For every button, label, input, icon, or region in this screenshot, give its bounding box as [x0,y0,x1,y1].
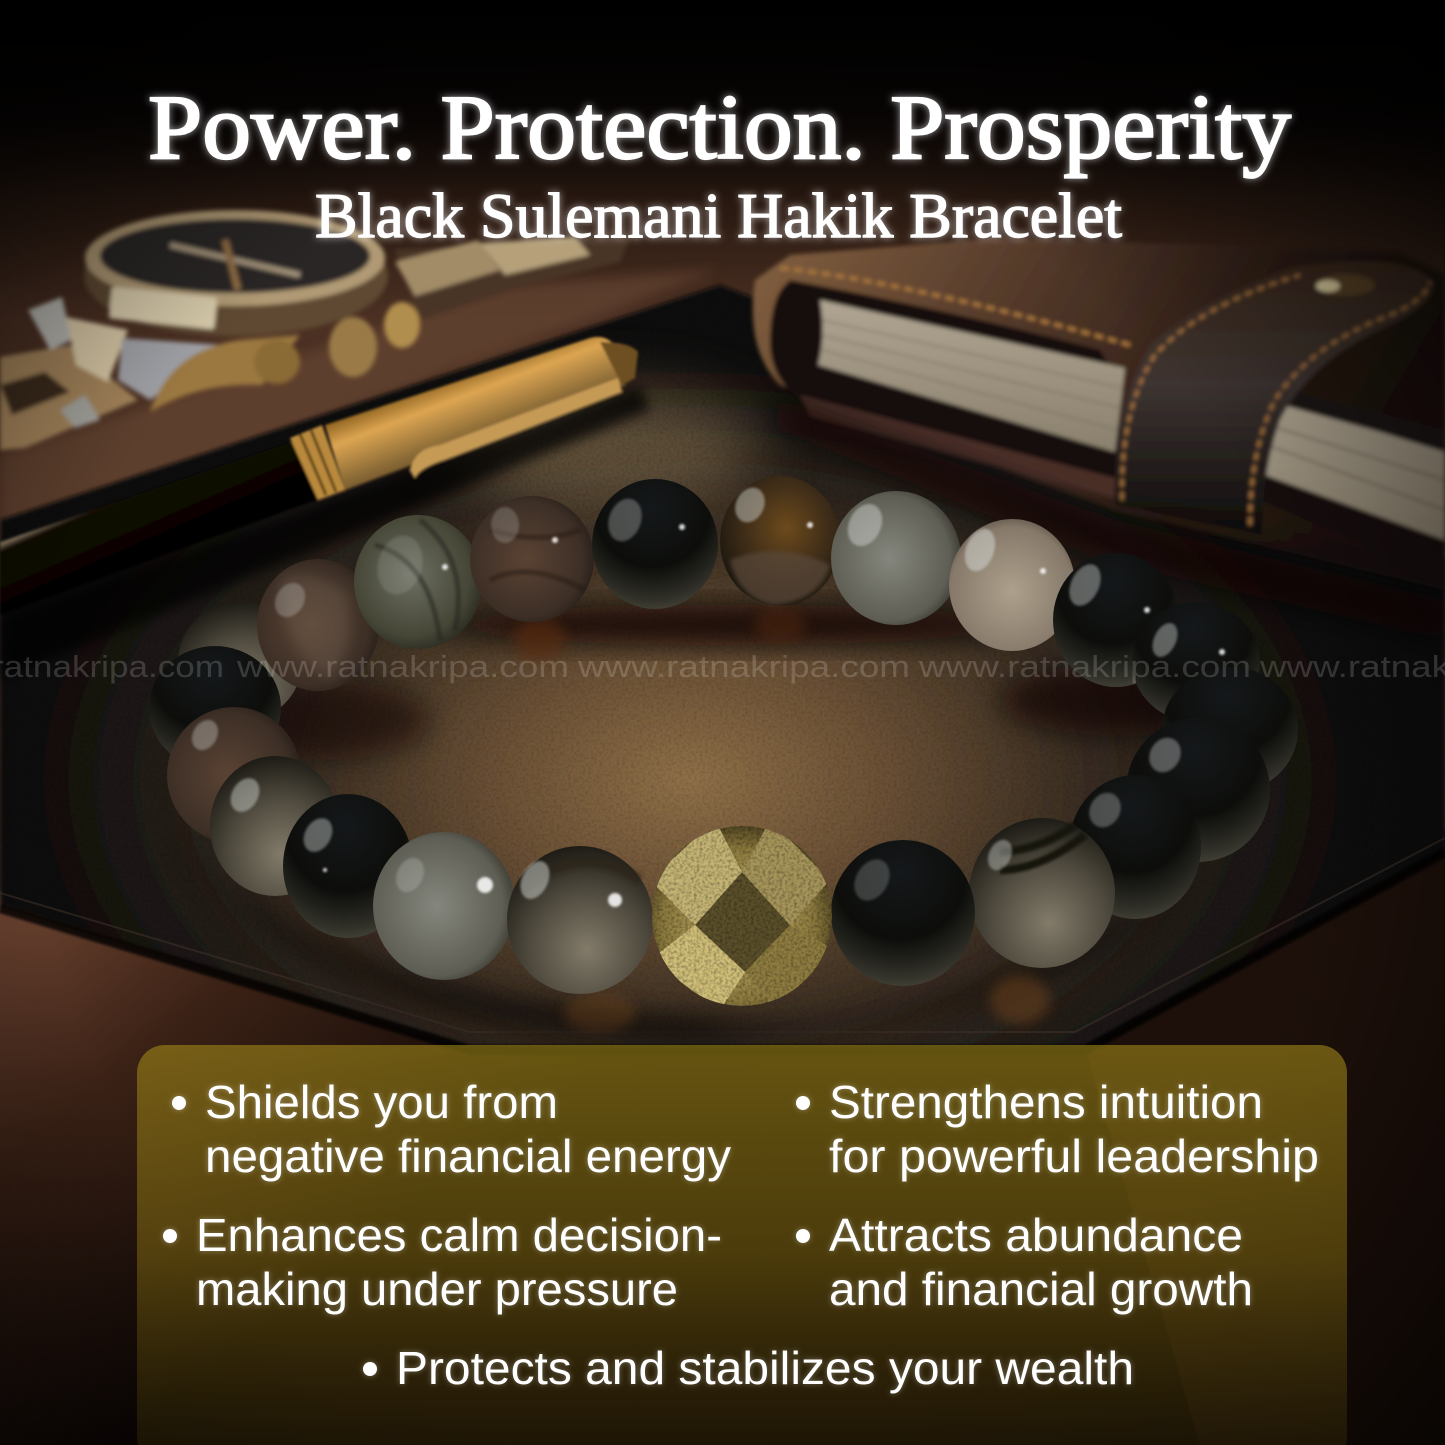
notebook [753,238,1445,640]
left beads [149,646,653,994]
watermark [0,649,1445,684]
benefit: wealth: Protects and stabilizes your wealth [396,1342,1134,1394]
benefit: abundance [796,1209,1253,1315]
subtitle: Black Sulemani Hakik Bracelet [315,180,1122,251]
benefit: intuition [796,1076,1319,1182]
benefit: intuition: Strengthens intuition [829,1076,1263,1128]
watermark: www.ratnakripa.com [577,649,910,684]
right beads [831,667,1298,986]
back beads [178,476,1260,722]
specular dots [323,522,1225,907]
benefit: intuition: for powerful leadership [829,1130,1319,1182]
benefit: calm decisions: Enhances calm decision- [196,1209,722,1261]
benefit: abundance: Attracts abundance [829,1209,1243,1261]
watermark: www.ratnak [1259,649,1445,684]
watermark: www.ratnakripa.com [918,649,1251,684]
bracelet [149,476,1298,1010]
panel: benefits [137,1045,1347,1445]
benefit: shields: Shields you from [205,1076,558,1128]
benefit: calm decisions [163,1209,722,1315]
pen [0,337,650,680]
wristwatch [0,210,630,450]
benefit: shields: negative financial energy [205,1130,731,1182]
bracelet shadow and reflections [170,605,1240,1040]
highlights [187,483,1187,907]
leather desk pad [0,283,1445,1053]
watermark: www.ratnakripa.com [236,649,569,684]
pyrite bead [650,820,835,1010]
title: Power. Protection. Prosperity [148,76,1291,178]
benefit: shields [172,1076,731,1182]
benefit: calm decisions: making under pressure [196,1263,678,1315]
benefit: abundance: and financial growth [829,1263,1253,1315]
